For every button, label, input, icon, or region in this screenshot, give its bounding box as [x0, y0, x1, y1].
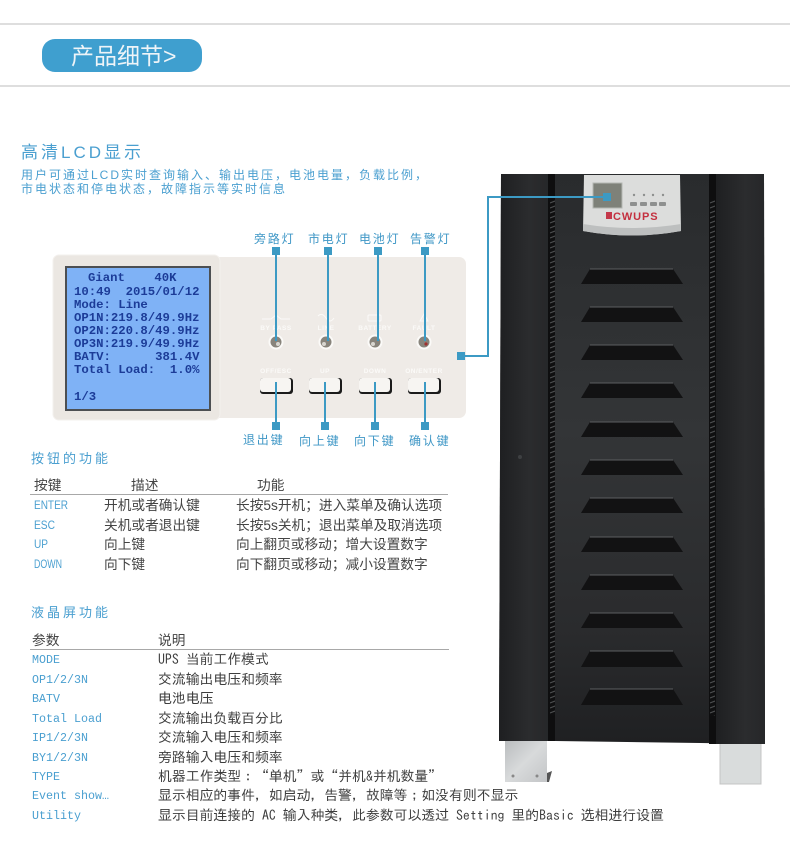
table: LCD functions: 电池电压: [158, 691, 214, 705]
LCD screen: [65, 266, 211, 411]
description text: 市电状态和停电状态，故障指示等实时信息: [21, 181, 287, 196]
callouts: buttons: 确认键: [409, 434, 450, 448]
callouts: indicator lights: 市电灯: [308, 231, 349, 246]
table: LCD functions: 显示目前连接的 AC 输入种类，此参数可以透过 Setting 里的Basic 选相进行设置: [158, 808, 664, 823]
callouts: indicator lights: 旁路灯: [254, 231, 295, 246]
callouts: buttons: [243, 382, 450, 448]
callouts: buttons: 向上键: [299, 433, 340, 448]
table: LCD functions: 说明: [158, 633, 185, 648]
table: LCD functions: 旁路输入电压和频率: [158, 750, 283, 764]
table: button functions: UP: [34, 537, 48, 551]
connector arrow from panel to cabinet display: [457, 193, 611, 360]
callouts: indicator lights: [254, 231, 451, 341]
description text: 用户可通过LCD实时查询输入、输出电压，电池电量，负载比例，: [21, 167, 429, 182]
heading: button functions: 按钮的功能: [31, 451, 111, 466]
callouts: buttons: 向下键: [354, 433, 395, 448]
table: LCD functions: 交流输入电压和频率: [158, 730, 283, 744]
LCD screen: 1/3: [74, 390, 96, 404]
table: LCD functions: 机器工作类型：“单机”或“并机&并机数量”: [158, 768, 442, 783]
cabinet body: [499, 174, 765, 744]
button labels: OFF/ESC: [260, 368, 292, 375]
table: button functions: 向下翻页或移动；减小设置数字: [236, 557, 428, 573]
heading: HD LCD display: 高清LCD显示: [21, 143, 144, 162]
LCD screen: Giant 40K: [88, 271, 177, 285]
table: button functions: ESC: [34, 518, 55, 532]
ventilation slots: [581, 269, 683, 705]
indicator icons: [262, 314, 428, 321]
table: LCD functions: [30, 632, 664, 823]
callouts: indicator lights: 告警灯: [410, 231, 451, 246]
table: LCD functions: OP1/2/3N: [32, 673, 88, 687]
section title pill: 产品细节>: [71, 43, 176, 69]
table: button functions: 按键: [34, 478, 62, 493]
table: button functions: 向下键: [104, 557, 145, 572]
indicator LEDs: [268, 334, 432, 350]
table: button functions: 长按5s开机；进入菜单及确认选项: [236, 498, 442, 514]
LCD screen: OP3N:219.9/49.9Hz: [74, 337, 199, 351]
front control panel: CWUPS: [613, 211, 658, 223]
table: LCD functions: TYPE: [32, 770, 60, 784]
panel body: [212, 257, 466, 418]
table: LCD functions: BY1/2/3N: [32, 751, 88, 765]
table: LCD functions: 参数: [32, 632, 60, 648]
section title pill: [42, 39, 202, 72]
front control panel: [583, 175, 681, 236]
table: button functions: 开机或者确认键: [104, 498, 200, 513]
table: button functions: 向上翻页或移动；增大设置数字: [236, 537, 428, 553]
table: button functions: 描述: [131, 478, 159, 493]
LCD screen: OP2N:220.8/49.9Hz: [74, 324, 199, 338]
LCD screen: OP1N:219.8/49.9Hz: [74, 311, 199, 325]
indicator labels: LINE: [318, 325, 335, 332]
table: LCD functions: Event show…: [32, 789, 109, 803]
table: button functions: [30, 478, 448, 573]
door latch: [518, 455, 522, 459]
table: button functions: 长按5s关机；退出菜单及取消选项: [236, 518, 442, 534]
lower divider: [0, 85, 790, 87]
top divider: [0, 23, 790, 25]
callouts: buttons: 退出键: [243, 433, 284, 447]
table: LCD functions: 交流输出电压和频率: [158, 672, 283, 686]
button labels: DOWN: [364, 368, 386, 375]
right slot strip: [709, 174, 716, 744]
LCD screen: Mode: Line: [74, 298, 148, 312]
table: LCD functions: 显示相应的事件，如启动，告警，故障等；如没有则不显示: [158, 787, 518, 803]
LCD screen: BATV: 381.4V: [74, 350, 200, 364]
button labels: [260, 368, 443, 375]
table: LCD functions: UPS 当前工作模式: [158, 652, 269, 666]
indicator labels: FAULT: [413, 325, 435, 332]
vent highlights: [590, 269, 673, 689]
left slot strip: [548, 174, 555, 741]
indicator labels: BATTERY: [358, 325, 392, 332]
indicator labels: [260, 325, 435, 332]
table: LCD functions: Utility: [32, 809, 81, 823]
description text: [21, 167, 429, 196]
legs: [505, 740, 761, 784]
left door: [499, 174, 549, 741]
right door: [715, 174, 765, 744]
table: button functions: DOWN: [34, 557, 62, 571]
table: button functions: ENTER: [34, 498, 68, 512]
LCD screen: 10:49 2015/01/12: [74, 285, 199, 299]
screen bezel: [53, 255, 220, 420]
table: LCD functions: 交流输出负载百分比: [158, 711, 283, 726]
buttons: [260, 378, 441, 394]
table: LCD functions: MODE: [32, 653, 60, 667]
callouts: indicator lights: 电池灯: [359, 232, 400, 246]
table: button functions: 功能: [257, 478, 285, 493]
button labels: UP: [320, 368, 330, 375]
table: LCD functions: Total Load: [32, 712, 102, 726]
button labels: ON/ENTER: [405, 368, 443, 375]
table: button functions: 向上键: [104, 537, 145, 552]
table: button functions: 关机或者退出键: [104, 518, 200, 533]
table: LCD functions: BATV: [32, 692, 60, 706]
heading: LCD functions: 液晶屏功能: [31, 605, 111, 620]
UPS cabinet: [499, 174, 765, 784]
panel: LCD control panel close-up: [53, 255, 466, 420]
LCD screen: Total Load: 1.0%: [74, 363, 200, 377]
table: LCD functions: IP1/2/3N: [32, 731, 88, 745]
indicator labels: BY PASS: [260, 325, 292, 332]
